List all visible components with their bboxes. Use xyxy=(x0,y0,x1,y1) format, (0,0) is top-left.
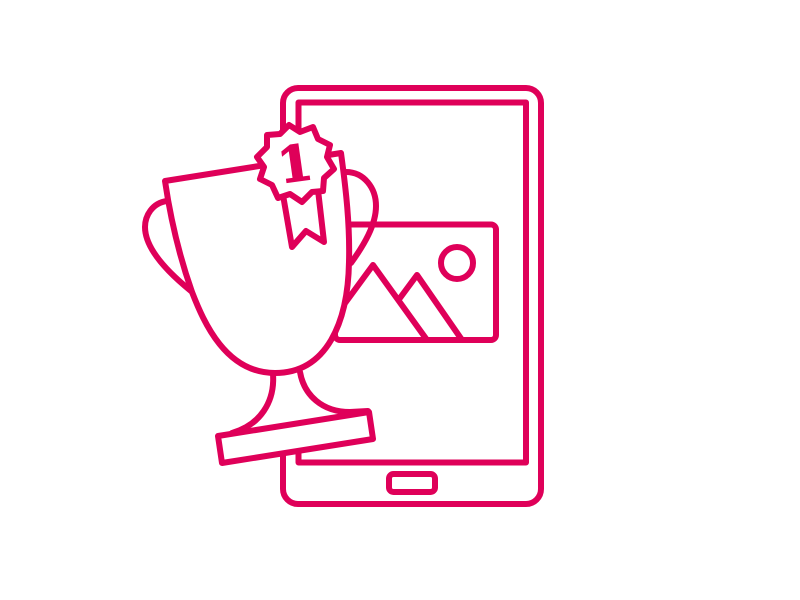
ribbon tails xyxy=(283,190,324,247)
left handle xyxy=(145,201,191,291)
stem right curve xyxy=(300,372,368,412)
tablet screen xyxy=(298,102,526,462)
large mountain xyxy=(340,265,427,340)
icon: trophy xyxy=(145,125,376,463)
icon: tablet xyxy=(283,88,541,504)
rosette xyxy=(257,125,334,202)
picture frame xyxy=(335,224,496,340)
right handle xyxy=(346,172,376,263)
small mountain xyxy=(400,275,462,340)
picture sun xyxy=(441,247,473,279)
tablet body xyxy=(283,88,541,504)
tablet home button xyxy=(389,474,435,492)
trophy stem xyxy=(232,370,345,433)
icon: picture on screen xyxy=(335,224,496,340)
stem left curve xyxy=(232,374,273,433)
rosette number: 1 xyxy=(274,133,316,195)
trophy cup xyxy=(165,153,349,373)
trophy base xyxy=(218,412,373,463)
